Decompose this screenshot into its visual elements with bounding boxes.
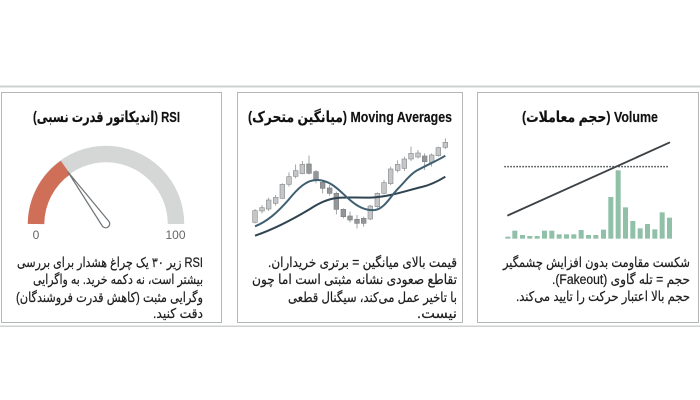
- text: Moving Averages description: با تاخیر عمل می‌کند، سیگنال قطعی: [288, 289, 457, 306]
- text: RSI description: دقت کنید.: [153, 306, 203, 321]
- gauge chart: [33, 154, 186, 242]
- panel: Volume: [478, 92, 698, 322]
- text: RSI description: وگرایی مثبت (کاهش قدرت فروشندگان): [16, 289, 203, 306]
- text: Moving Averages description: [252, 254, 457, 321]
- text: Moving Averages description: تقاطع صعودی نشانه مثبتی است اما چون: [252, 272, 457, 288]
- panel: RSI: [2, 92, 222, 322]
- heading: RSI: RSI (اندیکاتور قدرت نسبی): [33, 109, 180, 126]
- text: Volume description: حجم = تله گاوی (Fakeout).: [552, 271, 690, 288]
- heading: Moving Averages: Moving Averages (میانگین متحرک): [248, 108, 452, 126]
- text: RSI description: بیشتر است، نه دکمه خرید. به واگرایی: [33, 271, 203, 288]
- volume chart: [504, 142, 672, 239]
- text: RSI description: RSI زیر ۳۰ یک چراغ هشدار برای بررسی: [17, 255, 203, 271]
- panel: Moving Averages: [238, 92, 462, 322]
- gauge chart: 100: [165, 228, 186, 242]
- text: Moving Averages description: نیست.: [417, 306, 457, 321]
- gauge chart: 0: [33, 228, 40, 242]
- heading: Volume: Volume (حجم معاملات): [522, 109, 658, 126]
- text: Volume description: [502, 254, 690, 305]
- text: Moving Averages description: قیمت بالای میانگین = برتری خریداران.: [268, 254, 457, 271]
- candlestick chart: [253, 138, 448, 236]
- text: RSI description: [16, 255, 203, 321]
